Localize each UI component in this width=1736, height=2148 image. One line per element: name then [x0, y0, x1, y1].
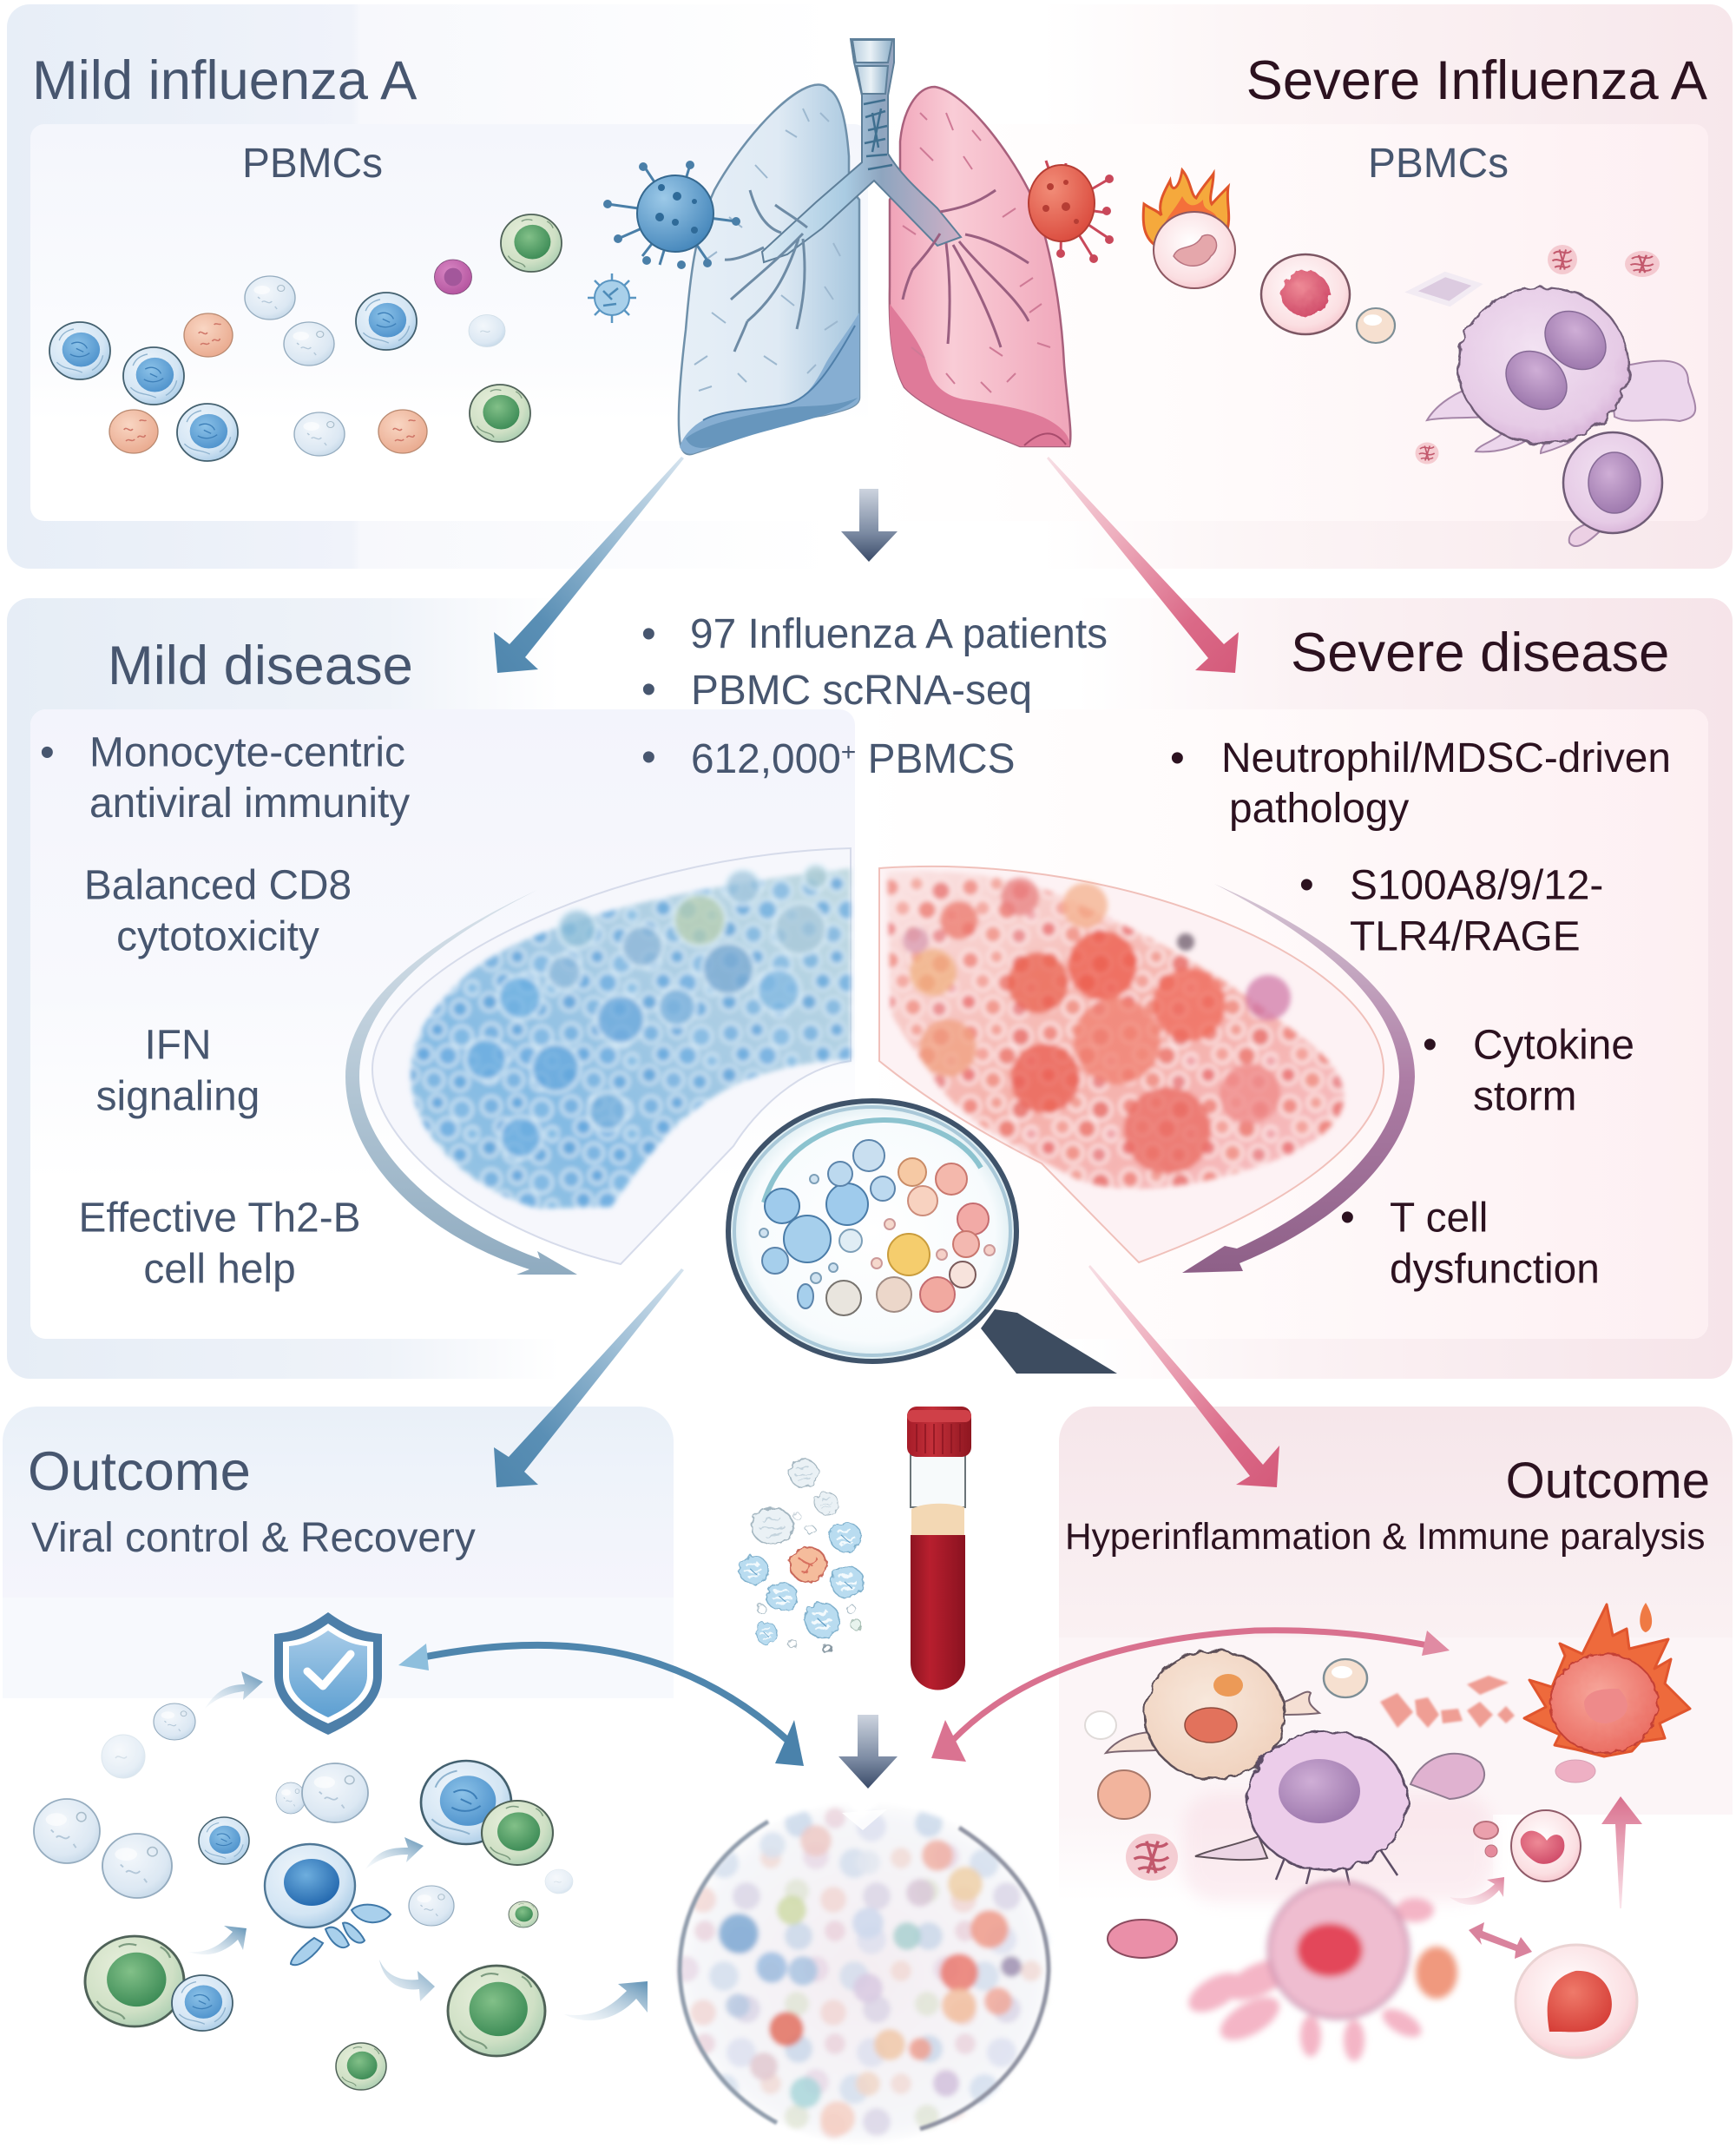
mild disease bullets: •	[40, 729, 55, 776]
arrow: magnifier to severe outcome	[1088, 1265, 1279, 1487]
cell: tan	[1106, 1651, 1319, 1779]
cell: purple activated	[1195, 1731, 1484, 1886]
right lung	[890, 87, 1070, 446]
cell: flaming red	[1524, 1603, 1690, 1756]
mild disease bullets: Balanced CD8	[84, 863, 352, 908]
panel: outcome mild background	[3, 1407, 674, 1698]
study bullets: 97 Influenza A patients	[690, 611, 1108, 657]
title: outcome mild: Outcome	[28, 1441, 251, 1502]
mild disease bullets	[40, 729, 410, 1292]
severe disease bullets: •	[1170, 735, 1185, 781]
arrow: curve between orb and flame cell	[931, 1631, 1450, 1762]
mild disease bullets: IFN	[144, 1023, 212, 1068]
label: PBMCs mild: PBMCs	[242, 141, 383, 187]
central B cell with vesicles	[265, 1844, 391, 1965]
mild disease bullets: signaling	[96, 1073, 260, 1120]
left lung	[679, 85, 859, 454]
severe disease bullets: storm	[1473, 1073, 1576, 1120]
panel: top background	[7, 4, 1733, 569]
severe disease bullets: Cytokine	[1473, 1023, 1634, 1068]
lungs	[679, 39, 1070, 454]
icon: blue virus large	[603, 161, 740, 269]
study bullets	[641, 611, 1108, 782]
title: severe influenza A: Severe Influenza A	[1246, 50, 1708, 111]
mild disease bullets: cytotoxicity	[116, 913, 319, 960]
cell: purple lower	[1563, 432, 1662, 546]
severe disease bullets: TLR4/RAGE	[1350, 913, 1581, 960]
cell: blurred pink	[1182, 1882, 1457, 2061]
panel: middle background	[7, 598, 1733, 1379]
arrow: severe up	[1601, 1796, 1642, 1908]
mild disease bullets: antiviral immunity	[89, 781, 410, 827]
severe disease bullets: T cell	[1390, 1195, 1488, 1242]
study bullets: •	[641, 611, 656, 657]
cell: large purple macrophage	[1427, 287, 1695, 453]
severe disease bullets: •	[1340, 1195, 1355, 1241]
severe disease bullets	[1170, 735, 1671, 1292]
arrow: mild curve to magnifier	[345, 890, 577, 1275]
panel: outcome severe background	[1059, 1407, 1733, 1901]
icon: flaming cell	[1143, 170, 1235, 288]
severe disease bullets: dysfunction	[1390, 1247, 1600, 1292]
blood cell fragments	[739, 1459, 864, 1653]
severe outcome cells	[1085, 1603, 1690, 2061]
mild disease bullets: cell help	[143, 1247, 296, 1292]
subtitle: outcome mild: Viral control & Recovery	[31, 1515, 476, 1561]
arrow: centre down bottom	[838, 1715, 898, 1789]
mild disease bullets: Monocyte-centric	[89, 729, 405, 776]
arrow: lungs to mild disease	[494, 457, 684, 673]
title: mild influenza A: Mild influenza A	[32, 50, 418, 111]
arrow: severe double headed	[1469, 1922, 1532, 1959]
orb: mixed PBMC sphere	[678, 1804, 1051, 2143]
study bullets: 612,000	[691, 736, 841, 782]
arrow: lungs to severe disease	[1047, 457, 1239, 673]
sector: mild backdrop with thin arc	[372, 848, 851, 1264]
icon: blue virus small	[588, 273, 636, 323]
cytokine chain	[1380, 1676, 1515, 1728]
severe disease bullets: S100A8/9/12-	[1350, 863, 1603, 908]
subtitle: outcome severe: Hyperinflammation & Immune paralysis	[1065, 1516, 1705, 1557]
severe disease bullets: Neutrophil/MDSC-driven	[1221, 735, 1671, 781]
panel: pink haze behind cells	[1183, 1793, 1493, 1902]
cell cluster: severe scRNA map	[887, 871, 1344, 1189]
arrows: mild cell flow	[188, 1671, 648, 2020]
severe disease bullets: •	[1423, 1022, 1437, 1068]
arrow: severe curved small	[1450, 1877, 1504, 1905]
label: PBMCs severe: PBMCs	[1368, 141, 1509, 187]
cell: red lobed	[1474, 1810, 1581, 1881]
cell: pink	[1261, 254, 1350, 334]
mild outcome cells	[34, 1703, 573, 2090]
cell cluster: mild scRNA map	[411, 865, 851, 1209]
title: outcome severe: Outcome	[1506, 1453, 1710, 1509]
trachea and bronchi	[725, 39, 1029, 352]
arrow: severe curve to magnifier	[1182, 884, 1415, 1273]
icon: shield	[274, 1612, 382, 1735]
study bullets: •	[641, 735, 656, 781]
icon: blood tube	[907, 1407, 971, 1690]
icon: magnifying glass	[728, 1101, 1117, 1374]
study bullets: +	[841, 738, 856, 767]
arrow: curve between shield and orb	[398, 1644, 804, 1766]
title: mild disease: Mild disease	[108, 636, 413, 696]
severe disease bullets: pathology	[1229, 786, 1409, 832]
study bullets: •	[641, 667, 656, 713]
study bullets: PBMC scRNA-seq	[691, 668, 1032, 714]
mild disease bullets: Effective Th2-B	[78, 1195, 361, 1242]
mild PBMC cells	[49, 214, 562, 461]
cell: bead	[1357, 308, 1395, 343]
arrow: centre down top	[841, 489, 898, 562]
icon: red virus	[1029, 161, 1114, 263]
sector: severe backdrop with thin arc	[879, 866, 1384, 1262]
arrow: magnifier to mild outcome	[494, 1268, 684, 1487]
title: severe disease: Severe disease	[1291, 623, 1669, 683]
cell: hot nucleus	[1516, 1945, 1637, 2058]
study bullets: PBMCS	[856, 736, 1016, 782]
severe disease bullets: •	[1299, 862, 1314, 908]
debris	[1411, 245, 1660, 464]
